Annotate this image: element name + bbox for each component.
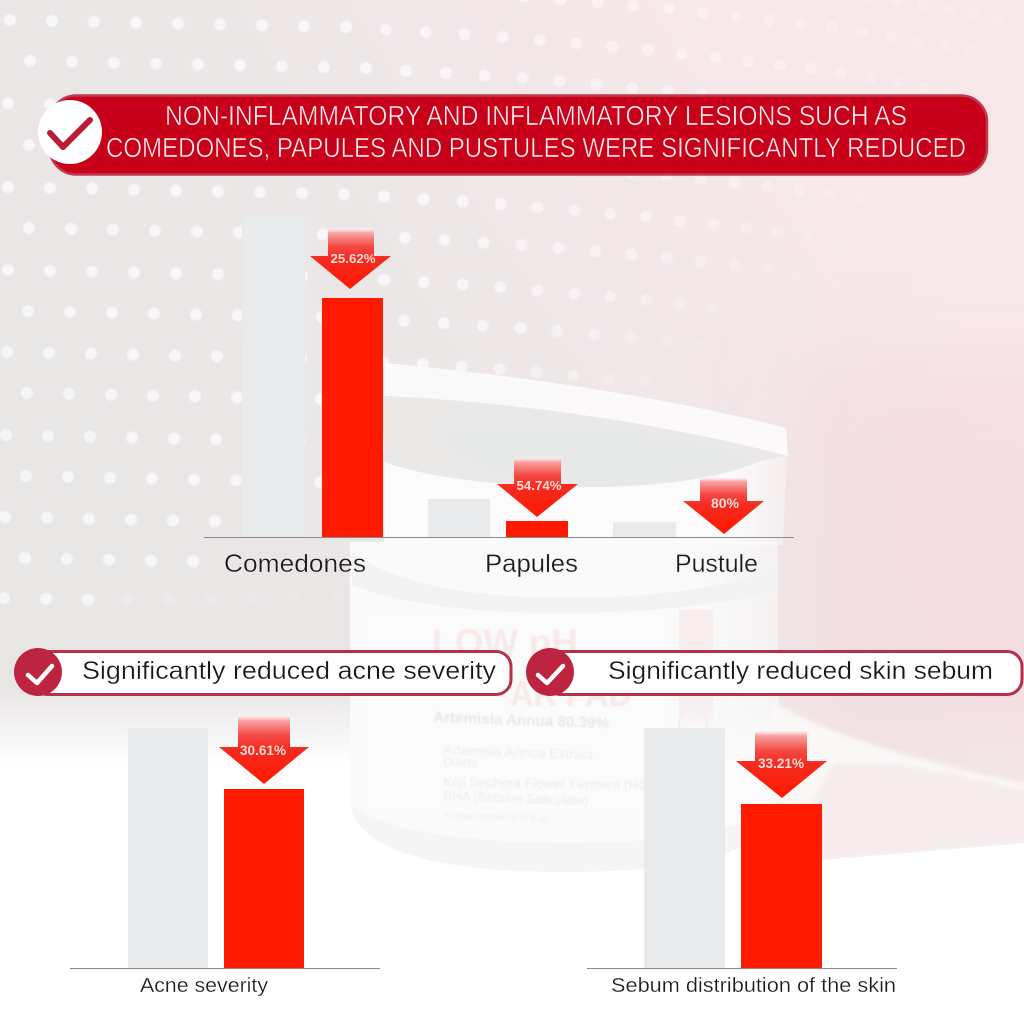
jar label text [432, 622, 648, 824]
arrow: papules 54.74%: 54.74% [516, 478, 562, 493]
arrow: pustule 80% [683, 477, 764, 534]
jar lid [384, 363, 788, 456]
jar label text: 70 Pads / 155ml / 5.24 fl. oz. [443, 811, 551, 824]
bars: comedones [242, 216, 383, 537]
jar inner rim [384, 456, 787, 545]
axis labels [224, 550, 758, 578]
jar label text: LOW pH [432, 622, 578, 663]
arrow: comedones 25.62%: 25.62% [330, 251, 376, 266]
banner: skin sebum [526, 648, 1022, 696]
jar interior [384, 396, 787, 487]
bar chart: acne severity [70, 715, 380, 997]
banner text: Significantly reduced skin sebum [608, 657, 993, 685]
bars [128, 728, 304, 968]
jar label text: Artemisia Annua 80.39% [433, 709, 609, 732]
dot pattern [0, 0, 720, 606]
bars: papules [428, 499, 568, 537]
arrow: papules 54.74% [497, 457, 578, 517]
arrow: 30.61% [219, 715, 309, 784]
arrow: 30.61%: 30.61% [240, 742, 287, 758]
product jar (faded) [350, 363, 788, 872]
icon: check [14, 648, 62, 696]
bar chart: sebum [587, 728, 897, 997]
arrow: 33.21% [736, 730, 827, 798]
axis label: Sebum distribution of the skin [611, 975, 896, 997]
icon: check [526, 648, 574, 696]
jar label [365, 614, 665, 814]
jar label text: Diarte [443, 754, 478, 770]
title text [106, 100, 966, 163]
axis labels: Papules [485, 550, 578, 578]
bar chart: lesions [204, 216, 794, 578]
jar label text: Artemisia Annua Extract [443, 742, 594, 762]
banner: acne severity [14, 648, 511, 696]
icon: white check circle [38, 100, 102, 164]
arrow: pustule 80%: 80% [711, 495, 740, 511]
jar body [350, 542, 778, 872]
title banner [38, 96, 987, 174]
bars [644, 728, 822, 968]
arrow: 33.21%: 33.21% [758, 755, 805, 771]
axis label: Acne severity [140, 975, 268, 997]
axis labels: Pustule [675, 550, 758, 578]
axis labels: Comedones [224, 550, 366, 578]
jar label text: AR PAD [510, 673, 632, 714]
jar label text: BHA (Betaine Salicylate) [443, 788, 588, 808]
arrow: comedones 25.62% [310, 228, 391, 289]
title text: NON-INFLAMMATORY AND INFLAMMATORY LESIONS SUCH AS [165, 100, 907, 131]
jar label text: Koji Sophora Flower Ferment (HC [443, 774, 648, 793]
banner text: Significantly reduced acne severity [82, 657, 497, 685]
bar: pustule [613, 522, 676, 537]
